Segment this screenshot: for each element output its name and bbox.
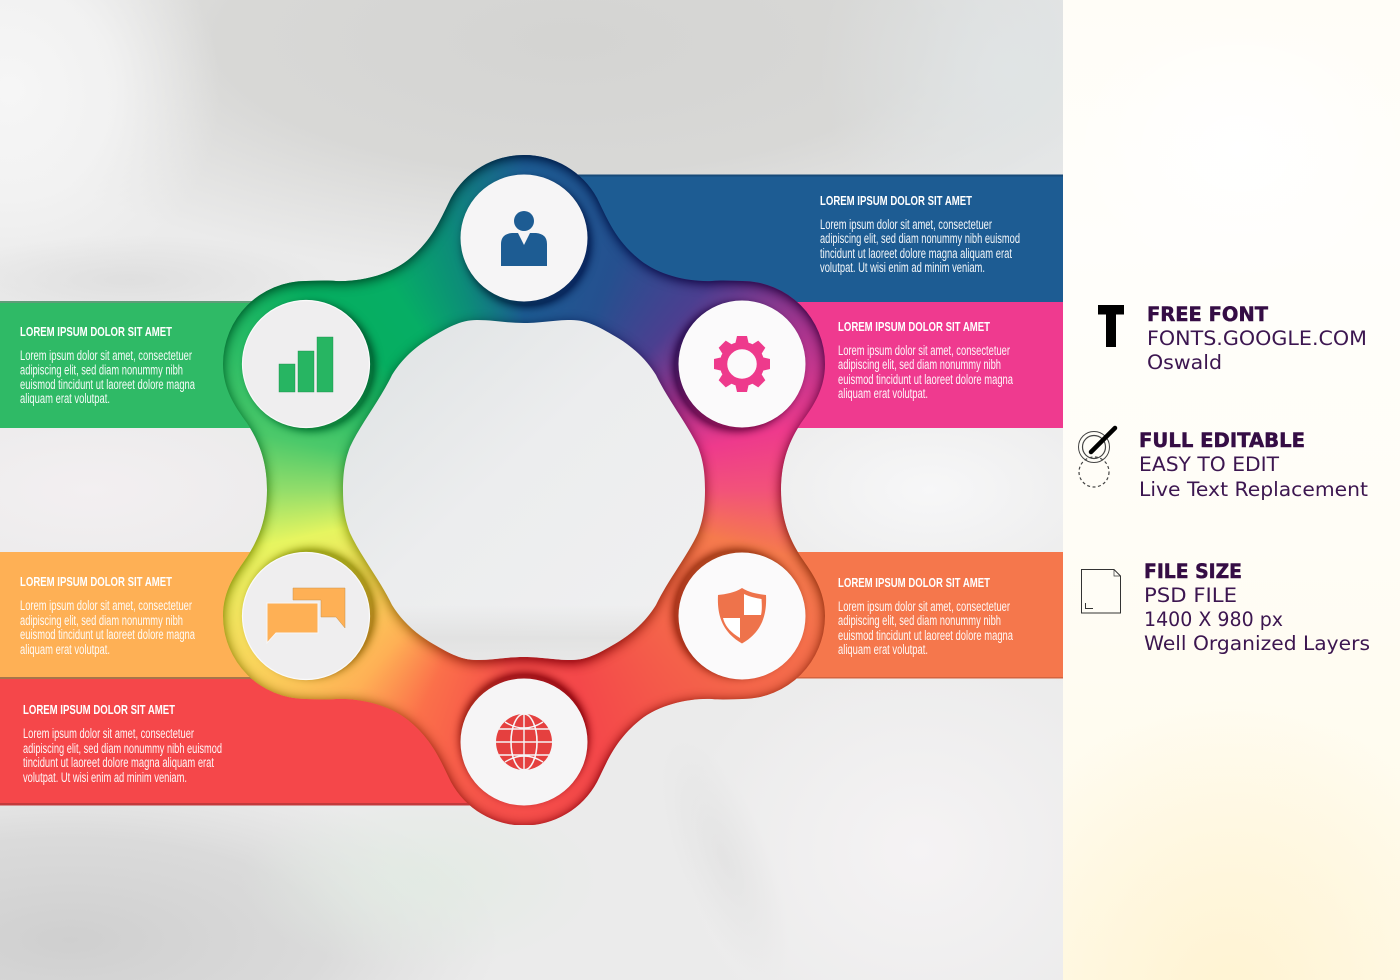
banner: orange left (0, 552, 285, 678)
circle: globe (460, 678, 588, 806)
banner text: red: LOREM IPSUM DOLOR SIT AMET (23, 702, 175, 717)
banner text: pink (838, 319, 1013, 401)
banner: red bottom left (0, 677, 510, 806)
text: file size: 1400 X 980 px (1144, 608, 1283, 631)
banner text: orange right: aliquam erat volutpat. (838, 642, 928, 657)
banner text: blue: volutpat. Ut wisi enim ad minim veniam. (820, 260, 985, 275)
info: file size (1082, 560, 1370, 655)
banner text: orange left: adipiscing elit, sed diam nonummy nibh (20, 613, 183, 628)
banner text: orange left: euismod tincidunt ut laoreet dolore magna (20, 627, 195, 642)
banner text: blue: Lorem ipsum dolor sit amet, consectetuer (820, 217, 992, 232)
icon: shield (718, 588, 766, 644)
text: free font: FREE FONT (1147, 303, 1269, 326)
banner text: pink: LOREM IPSUM DOLOR SIT AMET (838, 319, 990, 334)
circle: gear (678, 300, 806, 428)
text: full editable: Live Text Replacement (1139, 478, 1368, 501)
icon: letter T (1098, 305, 1124, 347)
banner: blue top right (524, 174, 1063, 302)
text: file size (1144, 560, 1370, 655)
text: file size: PSD FILE (1144, 584, 1237, 607)
info: free font (1098, 303, 1367, 374)
banner text: blue (820, 193, 1020, 275)
banner text: orange left (20, 574, 195, 657)
text: free font: FONTS.GOOGLE.COM (1147, 327, 1367, 350)
text: file size: Well Organized Layers (1144, 632, 1370, 655)
banner text: pink: euismod tincidunt ut laoreet dolore magna (838, 372, 1013, 387)
banner text: orange right (838, 575, 1013, 657)
text: free font: Oswald (1147, 351, 1222, 374)
info: full editable (1078, 428, 1368, 501)
banner text: orange right: LOREM IPSUM DOLOR SIT AMET (838, 575, 990, 590)
banner text: orange right: adipiscing elit, sed diam nonummy nibh (838, 613, 1001, 628)
banner: green left (0, 301, 285, 428)
circle: shield (678, 552, 806, 680)
banner text: orange left: aliquam erat volutpat. (20, 642, 110, 657)
circle: chat (242, 552, 370, 680)
banner: pink right (760, 302, 1063, 428)
banner text: orange left: Lorem ipsum dolor sit amet, consectetuer (20, 598, 192, 613)
icon: person (501, 211, 547, 266)
right info panel background (1063, 0, 1400, 980)
banner text: pink: adipiscing elit, sed diam nonummy nibh (838, 357, 1001, 372)
icon: brush and circles (1078, 428, 1115, 487)
banner text: orange right: euismod tincidunt ut laoreet dolore magna (838, 628, 1013, 643)
icon: gear (714, 336, 770, 392)
banner text: blue: LOREM IPSUM DOLOR SIT AMET (820, 193, 972, 208)
text: free font (1147, 303, 1367, 374)
banner text: red: adipiscing elit, sed diam nonummy nibh euismod (23, 741, 222, 756)
circle: bar chart (242, 300, 370, 428)
banner text: red: Lorem ipsum dolor sit amet, consectetuer (23, 726, 194, 741)
banner text: red (23, 702, 222, 785)
banner text: green: euismod tincidunt ut laoreet dolore magna (20, 377, 195, 392)
banner text: green: Lorem ipsum dolor sit amet, consectetuer (20, 348, 192, 363)
banner text: red: tincidunt ut laoreet dolore magna aliquam erat (23, 755, 214, 770)
banner text: red: volutpat. Ut wisi enim ad minim veniam. (23, 770, 187, 785)
banner text: green: aliquam erat volutpat. (20, 391, 110, 406)
icon: bar chart (279, 337, 333, 392)
banner text: blue: tincidunt ut laoreet dolore magna aliquam erat (820, 246, 1012, 261)
banner text: blue: adipiscing elit, sed diam nonummy nibh euismod (820, 231, 1020, 246)
text: full editable (1139, 429, 1368, 501)
text: file size: FILE SIZE (1144, 560, 1242, 583)
banner text: green: adipiscing elit, sed diam nonummy nibh (20, 362, 183, 378)
banner text: green (20, 324, 195, 406)
gradient ring (223, 155, 825, 825)
banner text: green: LOREM IPSUM DOLOR SIT AMET (20, 324, 172, 339)
banner: orange right (760, 552, 1063, 678)
banner text: orange left: LOREM IPSUM DOLOR SIT AMET (20, 574, 172, 589)
text: full editable: EASY TO EDIT (1139, 453, 1279, 476)
banner text: pink: aliquam erat volutpat. (838, 386, 928, 401)
central hole (343, 320, 705, 660)
circle: person (460, 174, 588, 302)
icon: chat bubbles (267, 588, 345, 643)
blurred grey background (0, 0, 1063, 980)
banner text: pink: Lorem ipsum dolor sit amet, consectetuer (838, 343, 1010, 358)
icon: globe (496, 714, 552, 770)
banner text: orange right: Lorem ipsum dolor sit amet, consectetuer (838, 599, 1010, 614)
text: full editable: FULL EDITABLE (1139, 429, 1305, 452)
icon: file (1082, 570, 1120, 613)
